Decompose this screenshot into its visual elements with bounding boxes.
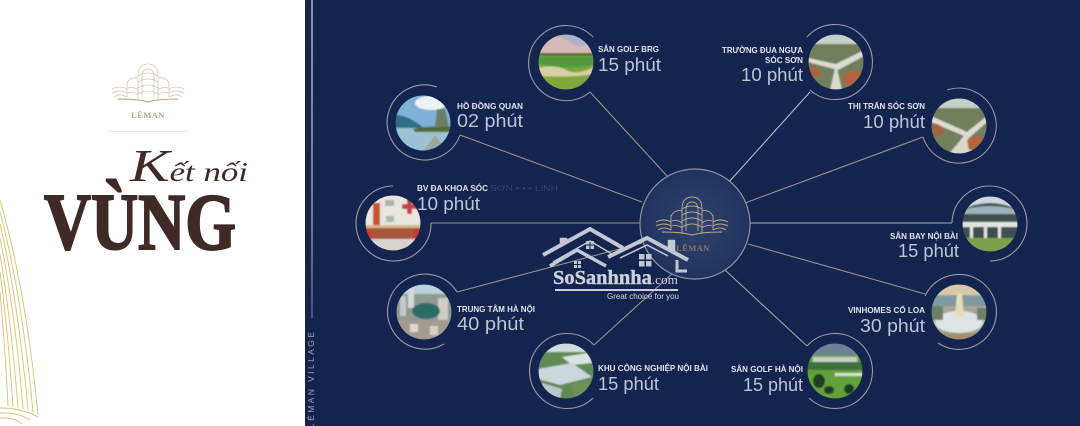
node: Hồ Đồng Quan: HỒ ĐỒNG QUAN bbox=[457, 100, 523, 111]
node: Trung tâm Hà Nội: 40 phút bbox=[457, 314, 524, 334]
node: Sân bay Nội Bài: 15 phút bbox=[898, 241, 959, 261]
node: Hồ Đồng Quan bbox=[387, 85, 523, 160]
node: Vinhomes Cổ Loa bbox=[848, 274, 996, 349]
node: Sân Golf BRG: 15 phút bbox=[598, 55, 661, 75]
node: Thị trấn Sóc Sơn: THỊ TRẤN SÓC SƠN bbox=[848, 100, 925, 111]
node: BV Đa khoa Sóc Sơn: SƠN • • • LINH bbox=[490, 184, 558, 193]
watermark tagline: Great choice for you bbox=[607, 292, 679, 301]
connector lines bbox=[431, 92, 952, 346]
node: Sân golf Hà Nội: 15 phút bbox=[743, 375, 803, 395]
panel: navy connection map bbox=[305, 0, 1080, 426]
watermark: SoSanhnha.com bbox=[543, 229, 688, 301]
node: Khu công nghiệp Nội Bài bbox=[529, 333, 708, 408]
subtitle: K ết nối bbox=[129, 140, 248, 191]
node: Trường đua ngựa Sóc Sơn bbox=[722, 25, 872, 100]
node: Sân bay Nội Bài: SÂN BAY NỘI BÀI bbox=[890, 230, 958, 241]
node: Vinhomes Cổ Loa: VINHOMES CỔ LOA bbox=[848, 304, 925, 315]
decorative golden tower lines bbox=[0, 200, 38, 424]
node: Thị trấn Sóc Sơn: 10 phút bbox=[863, 112, 925, 132]
node: BV Đa khoa Sóc Sơn: 10 phút bbox=[417, 194, 480, 214]
node: Sân golf Hà Nội: SÂN GOLF HÀ NỘI bbox=[731, 363, 803, 374]
node: Trung tâm Hà Nội: TRUNG TÂM HÀ NỘI bbox=[457, 303, 535, 314]
node: Thị trấn Sóc Sơn bbox=[848, 88, 996, 163]
node: Khu công nghiệp Nội Bài: KHU CÔNG NGHIỆP NỘI BÀI bbox=[598, 362, 708, 373]
node: Trung tâm Hà Nội bbox=[388, 274, 535, 349]
node: Khu công nghiệp Nội Bài: 15 phút bbox=[598, 374, 659, 394]
node: Sân Golf BRG: SÂN GOLF BRG bbox=[598, 43, 659, 54]
hub logo bbox=[656, 197, 728, 235]
logo wordmark: LÊMAN bbox=[131, 110, 165, 120]
watermark wordmark: SoSanhnha.com bbox=[553, 267, 678, 289]
hub wordmark: LÊMAN bbox=[676, 243, 710, 253]
panel: left white title panel bbox=[0, 64, 247, 424]
node: Sân bay Nội Bài bbox=[890, 186, 1027, 261]
icon: houses bbox=[543, 229, 688, 271]
node: Hồ Đồng Quan: 02 phút bbox=[457, 111, 523, 131]
title: VÙNG bbox=[44, 179, 236, 267]
side rule bbox=[312, 0, 313, 318]
node: Trường đua ngựa Sóc Sơn: SÓC SƠN bbox=[765, 54, 803, 65]
node: BV Đa khoa Sóc Sơn bbox=[356, 182, 558, 261]
node: Sân Golf BRG bbox=[529, 26, 661, 101]
node: Vinhomes Cổ Loa: 30 phút bbox=[860, 316, 925, 336]
side label: LÉMAN VILLAGE bbox=[306, 332, 316, 426]
logo: Leman top bbox=[112, 64, 184, 102]
hub: central Leman circle bbox=[640, 169, 750, 279]
watermark underline bbox=[555, 289, 678, 291]
node: Sân golf Hà Nội bbox=[731, 333, 872, 408]
node: BV Đa khoa Sóc Sơn: BV ĐA KHOA SÓC bbox=[417, 182, 488, 193]
node: Trường đua ngựa Sóc Sơn: 10 phút bbox=[741, 65, 803, 85]
divider bbox=[108, 130, 188, 132]
node: Trường đua ngựa Sóc Sơn: TRƯỜNG ĐUA NGỰA bbox=[722, 44, 803, 55]
